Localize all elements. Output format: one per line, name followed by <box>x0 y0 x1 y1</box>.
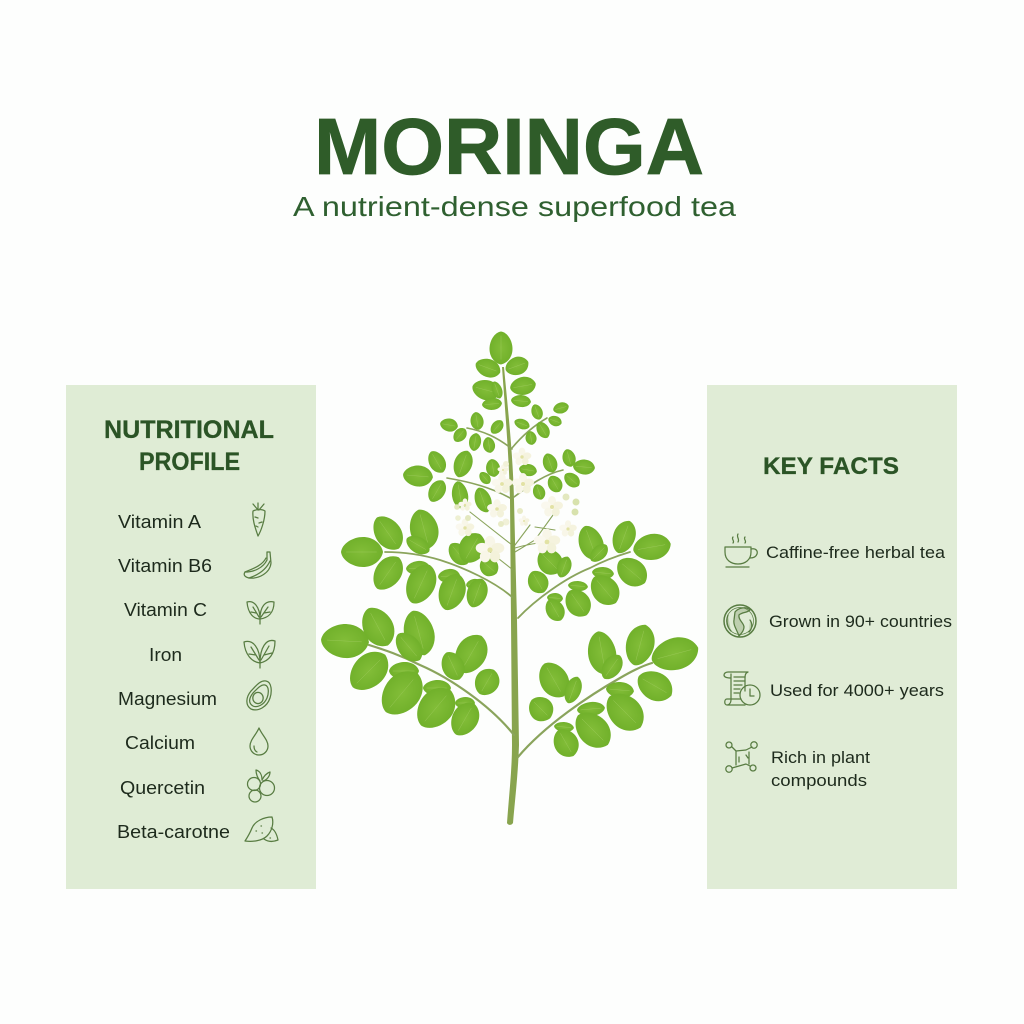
icon: scroll and clock <box>724 672 760 705</box>
icon: sweet potato <box>245 817 278 841</box>
leaves: upper left branch <box>341 506 502 614</box>
icon: globe <box>724 605 756 637</box>
icon: banana <box>244 552 271 578</box>
icon: carrot <box>253 503 265 536</box>
fact: years: Used for 4000+ years <box>770 681 944 700</box>
subtitle: A nutrient-dense superfood tea <box>293 191 736 222</box>
icon: avocado <box>247 681 271 710</box>
title: MORINGA <box>314 102 704 191</box>
nutrient: Quercetin: Quercetin <box>120 778 205 798</box>
nutrient: Vitamin C: Vitamin C <box>124 600 207 620</box>
heading: nutritional profile: NUTRITIONAL <box>104 416 274 444</box>
main stem <box>502 367 519 825</box>
nutrient: Calcium: Calcium <box>125 733 195 753</box>
nutrient: Iron: Iron <box>149 645 182 665</box>
icon: leaves vitamin C <box>247 602 274 624</box>
leaves: upper side branches <box>439 401 570 454</box>
leaves: lower left branch <box>320 601 504 741</box>
branches <box>369 418 652 757</box>
leaves: upper right branch <box>523 517 673 625</box>
flowers <box>454 448 580 562</box>
leaves: middle side branches <box>402 448 596 515</box>
leaves: lower right branch <box>523 621 702 762</box>
icon: tea cup <box>725 534 757 567</box>
nutrient: Magnesium: Magnesium <box>118 689 217 709</box>
icon: leaves iron <box>244 640 275 668</box>
fact: plant compounds: Rich in plant <box>771 748 870 767</box>
heading: key facts: KEY FACTS <box>763 453 899 480</box>
fact: countries: Grown in 90+ countries <box>769 612 952 631</box>
icon: drop <box>250 728 268 755</box>
icon: molecule <box>726 742 757 772</box>
heading: nutritional profile <box>104 416 274 476</box>
heading: nutritional profile: PROFILE <box>139 448 240 476</box>
fact: caffeine-free: Caffine-free herbal tea <box>766 543 946 562</box>
nutrient: Beta-carotne: Beta-carotne <box>117 822 230 842</box>
icon: berries <box>248 770 274 802</box>
nutrient: Vitamin A: Vitamin A <box>118 512 201 532</box>
leaves: top cluster <box>470 332 537 411</box>
nutrient: Vitamin B6: Vitamin B6 <box>118 556 212 576</box>
panel: nutritional profile <box>66 385 316 889</box>
panel: key facts <box>707 385 957 889</box>
fact: plant compounds: compounds <box>771 771 867 790</box>
moringa plant illustration <box>320 332 702 825</box>
fact: plant compounds <box>771 748 870 790</box>
